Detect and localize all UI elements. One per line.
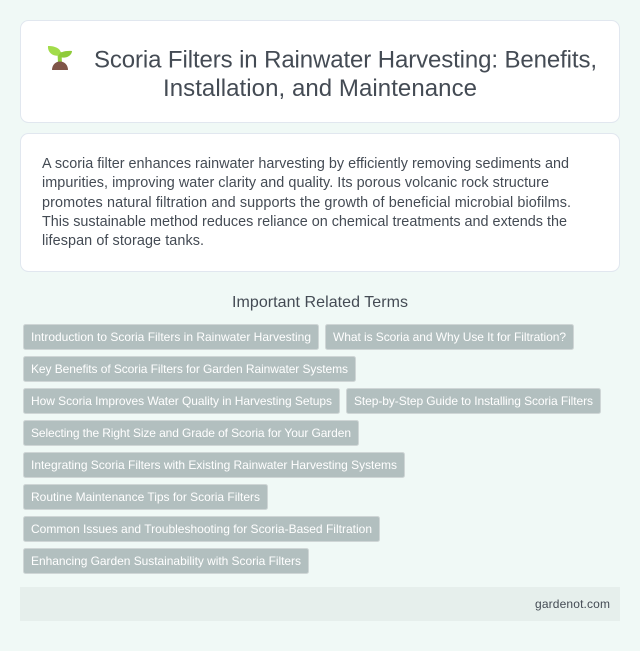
icon: seedling (48, 46, 72, 70)
footer credit: gardenot.com (535, 597, 610, 611)
chip: Key Benefits of Scoria Filters for Garden Rainwater Systems (31, 362, 348, 376)
chip: Introduction to Scoria Filters in Rainwater Harvesting (31, 330, 311, 344)
summary text: promotes natural filtration and supports the growth of beneficial microbial biofilms. (42, 195, 571, 211)
chip (326, 324, 574, 350)
summary text: impurities, improving water clarity and quality. Its porous volcanic rock structure (42, 175, 549, 191)
title: Installation, and Maintenance (163, 75, 477, 102)
footer bar (20, 587, 620, 621)
summary text: This sustainable method reduces reliance on chemical treatments and extends the (42, 214, 567, 230)
summary text: lifespan of storage tanks. (42, 233, 204, 249)
chip: Enhancing Garden Sustainability with Scoria Filters (31, 554, 301, 568)
chip (24, 356, 356, 382)
panel: title card (20, 20, 620, 122)
chip: Integrating Scoria Filters with Existing Rainwater Harvesting Systems (31, 458, 397, 472)
chip (24, 388, 340, 414)
chip (24, 484, 268, 510)
chip (24, 452, 404, 478)
chip (24, 324, 318, 350)
summary text (42, 156, 571, 249)
chip: Common Issues and Troubleshooting for Scoria-Based Filtration (31, 522, 372, 536)
chip (24, 516, 380, 542)
chip: What is Scoria and Why Use It for Filtration? (333, 330, 566, 344)
heading: important related terms: Important Related Terms (232, 294, 408, 311)
chip: Routine Maintenance Tips for Scoria Filters (31, 490, 260, 504)
chip: Selecting the Right Size and Grade of Scoria for Your Garden (31, 426, 351, 440)
title: Scoria Filters in Rainwater Harvesting: Benefits, (94, 46, 597, 74)
chip: Step-by-Step Guide to Installing Scoria Filters (354, 394, 593, 408)
chip: How Scoria Improves Water Quality in Harvesting Setups (31, 394, 332, 408)
title (94, 46, 597, 102)
summary text: A scoria filter enhances rainwater harvesting by efficiently removing sediments and (42, 156, 569, 172)
panel: summary card (20, 134, 620, 272)
chip (24, 420, 358, 446)
chip (24, 548, 308, 574)
related term chips (24, 324, 600, 574)
chip (346, 388, 600, 414)
